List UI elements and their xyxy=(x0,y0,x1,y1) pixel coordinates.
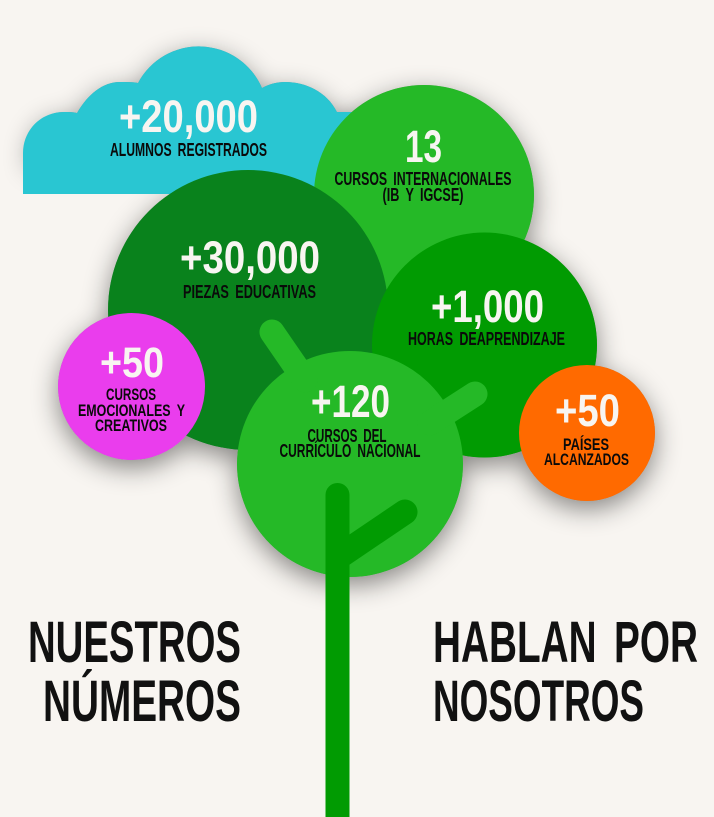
panel: circle, horas de aprendizaje xyxy=(372,232,597,458)
label: cursos del currículo nacional: CURSOS DEL xyxy=(308,426,386,446)
panel: circle, cursos emocionales y creativos xyxy=(58,313,205,460)
number: +1,000: +1,000 xyxy=(431,281,544,332)
heading: nuestros números: NÚMEROS xyxy=(43,669,241,734)
label: países alcanzados: PAÍSES xyxy=(563,435,609,454)
number: +30,000: +30,000 xyxy=(180,232,320,283)
number: +120: +120 xyxy=(311,376,390,427)
panel: circle, países alcanzados xyxy=(519,365,655,501)
number: 13: 13 xyxy=(405,121,442,172)
number: +20,000: +20,000 xyxy=(119,91,258,142)
label: cursos del currículo nacional: CURRÍCULO NACIONAL xyxy=(280,440,421,461)
number: +50: +50 xyxy=(555,385,620,436)
heading: nuestros números: NUESTROS xyxy=(28,610,241,675)
panel: circle, cursos internacionales xyxy=(314,85,534,305)
panel: cloud, alumnos registrados xyxy=(23,46,360,194)
label: alumnos registrados: ALUMNOS REGISTRADOS xyxy=(110,140,267,160)
soft shadow layer behind the tree xyxy=(30,46,655,577)
panel: circle, piezas educativas xyxy=(108,170,388,450)
branch: upper left xyxy=(272,332,305,380)
label: piezas educativas: PIEZAS EDUCATIVAS xyxy=(183,282,316,302)
label: cursos emocionales y creativos: EMOCIONALES Y xyxy=(78,401,185,420)
tree trunk and branch xyxy=(326,483,405,817)
label: cursos internacionales: (IB Y IGCSE) xyxy=(382,185,464,205)
label: horas de aprendizaje: HORAS DEAPRENDIZAJE xyxy=(408,329,565,349)
label: países alcanzados: ALCANZADOS xyxy=(544,450,629,469)
branch: upper right xyxy=(430,394,475,423)
panel: circle with tree crown, cursos del currículo nacional xyxy=(237,332,475,577)
label: cursos internacionales: CURSOS INTERNACIONALES xyxy=(334,169,512,189)
label: cursos emocionales y creativos: CURSOS xyxy=(106,385,156,404)
label: cursos emocionales y creativos: CREATIVOS xyxy=(95,416,167,435)
number: +50: +50 xyxy=(100,339,164,387)
